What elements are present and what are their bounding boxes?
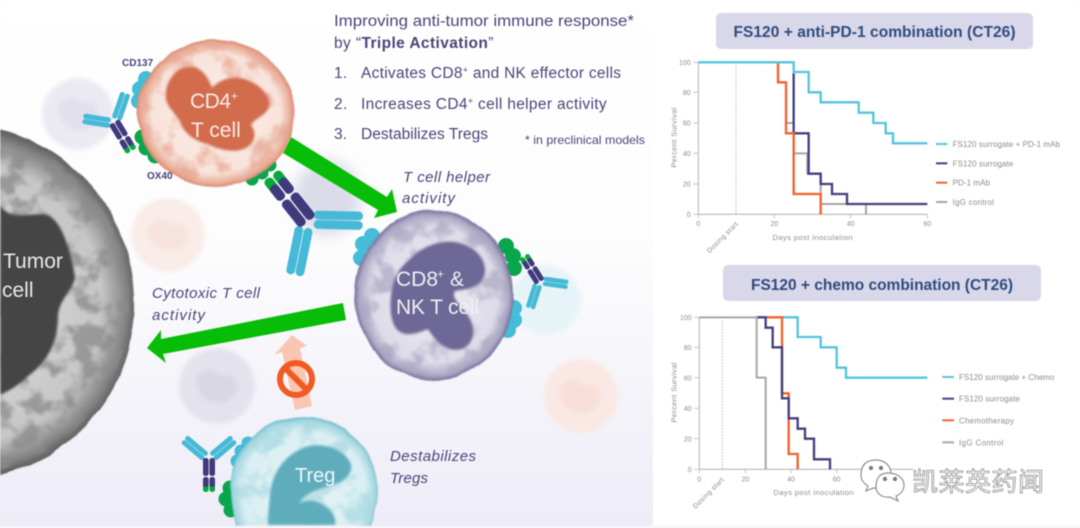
CD8 and NK T cell label: CD8 [396, 268, 438, 291]
legend: IgG control [953, 198, 994, 207]
label: OX40: OX40 [147, 171, 173, 182]
legend: FS120 surrogate [953, 159, 1014, 168]
axis labels [669, 315, 854, 510]
axis labels: 60 [683, 121, 691, 128]
panel: mechanism illustration [0, 0, 653, 526]
antibody: on CD4 cell left [82, 91, 136, 154]
axis labels: 100 [680, 315, 692, 322]
axis labels: Dosing start [706, 221, 740, 255]
axis labels: 20 [770, 221, 778, 228]
list item 2: 2. [334, 96, 348, 113]
legend [942, 373, 1055, 447]
axis labels: Percent Survival [669, 107, 678, 168]
watermark: WeChat icon [861, 460, 904, 501]
legend [936, 140, 1061, 207]
receptors on CD4 cell [131, 71, 276, 186]
receptors on Treg [218, 436, 254, 518]
background cell: lavender lower [179, 348, 255, 424]
chart title: anti-PD-1: FS120 + anti-PD-1 combination (CT26) [734, 24, 1016, 41]
axis labels: Days post inoculation [772, 233, 853, 242]
axis labels: 0 [696, 221, 700, 228]
footnote: * in preclinical models [525, 133, 645, 147]
axis labels: Days post inoculation [773, 488, 854, 497]
panel: survival charts background [653, 0, 1080, 526]
label: Destabilizes Tregs: Tregs [390, 470, 428, 487]
axis labels: 0 [688, 467, 692, 474]
antibody: on Treg [181, 435, 237, 492]
axis labels: Dosing start [692, 477, 726, 510]
axis labels: 60 [833, 477, 841, 484]
heading: by “ [334, 35, 361, 52]
CD4 T cell [137, 40, 295, 186]
axis labels: 0 [697, 477, 701, 484]
legend: IgG Control [959, 438, 1004, 447]
axis labels: 80 [683, 90, 691, 97]
heading and bullet list [334, 13, 645, 147]
chart: survival chemo [669, 315, 1055, 510]
legend: FS120 surrogate + Chemo [959, 373, 1055, 382]
CD4 T cell label: T cell [191, 119, 241, 142]
list item 2: + [468, 96, 473, 106]
background cell: pink lower right [544, 359, 618, 433]
heading: Triple Activation” [361, 35, 493, 52]
antibody: large between CD4 and CD8 cells [264, 170, 364, 277]
background cell: cyan right [511, 265, 581, 335]
label: Cytotoxic T cell activity: activity [152, 307, 206, 324]
legend: PD-1 mAb [953, 179, 991, 188]
axis labels: 100 [679, 60, 691, 67]
axis labels: 20 [741, 477, 749, 484]
icon: prohibition sign [280, 363, 312, 395]
Treg cell [230, 416, 378, 525]
chart: survival anti-PD-1 [669, 60, 1061, 255]
axis labels: 60 [684, 375, 692, 382]
label: CD137: CD137 [122, 58, 154, 69]
chart title: chemo: FS120 + chemo combination (CT26) [751, 277, 1013, 294]
chart title: anti-PD-1 [716, 13, 1033, 49]
CD8 and NK T cell label: & [450, 268, 464, 291]
CD4 T cell label: CD4 [190, 90, 231, 113]
axis labels [669, 60, 931, 255]
axis labels: 80 [684, 345, 692, 352]
axis labels: Percent Survival [669, 362, 678, 423]
list item 3: 3. [334, 126, 347, 143]
heading: Improving anti-tumor immune response* [334, 13, 634, 30]
list item 2: cell helper activity [473, 96, 607, 113]
label: Destabilizes Tregs: Destabilizes [390, 448, 476, 465]
receptors on CD8 cell [353, 228, 522, 338]
axis labels: 60 [923, 221, 931, 228]
axis labels: 40 [684, 406, 692, 413]
arrow: T cell helper activity [283, 137, 397, 218]
arrow: blocked Treg suppression [274, 335, 312, 410]
axis labels: 0 [687, 212, 691, 219]
Treg label: Treg [295, 465, 335, 487]
CD4 T cell label: + [231, 89, 238, 103]
list item 3: Destabilizes Tregs [361, 126, 488, 143]
list item 1: + [463, 65, 468, 75]
legend: FS120 surrogate [959, 395, 1021, 404]
label: T cell helper activity: activity [402, 190, 456, 207]
legend: Chemotherapy [959, 416, 1014, 425]
axis labels: 20 [684, 436, 692, 443]
axis labels: 20 [683, 182, 691, 189]
tumor label: Tumor [3, 250, 63, 273]
CD8 and NK T cell label: NK T cell [396, 296, 479, 319]
background cell: pink left [131, 198, 205, 272]
legend: FS120 surrogate + PD-1 mAb [953, 140, 1061, 149]
list item 1: 1. [334, 65, 347, 82]
list item 1: Activates CD8 [361, 65, 463, 82]
list item 2: Increases CD4 [361, 96, 468, 113]
CD8 and NK T cell [355, 210, 513, 380]
axis labels: 40 [847, 221, 855, 228]
tumor cell [0, 130, 135, 476]
background cell: lavender behind antibody [293, 160, 361, 236]
axis labels: 40 [787, 477, 795, 484]
antibody: right of CD8 cell [519, 253, 570, 310]
arrow: cytotoxic T cell activity [147, 303, 346, 363]
chart title: chemo [723, 265, 1041, 301]
CD8 and NK T cell label: + [437, 267, 444, 281]
list item 1: and NK effector cells [468, 65, 621, 82]
tumor label: cell [2, 279, 34, 302]
label: T cell helper activity: T cell helper [403, 169, 491, 186]
label: Cytotoxic T cell activity: Cytotoxic T cell [152, 285, 261, 302]
background cell: lavender upper left [42, 78, 114, 150]
watermark: account name: 凯莱英药闻 [912, 467, 1044, 497]
axis labels: 40 [683, 151, 691, 158]
